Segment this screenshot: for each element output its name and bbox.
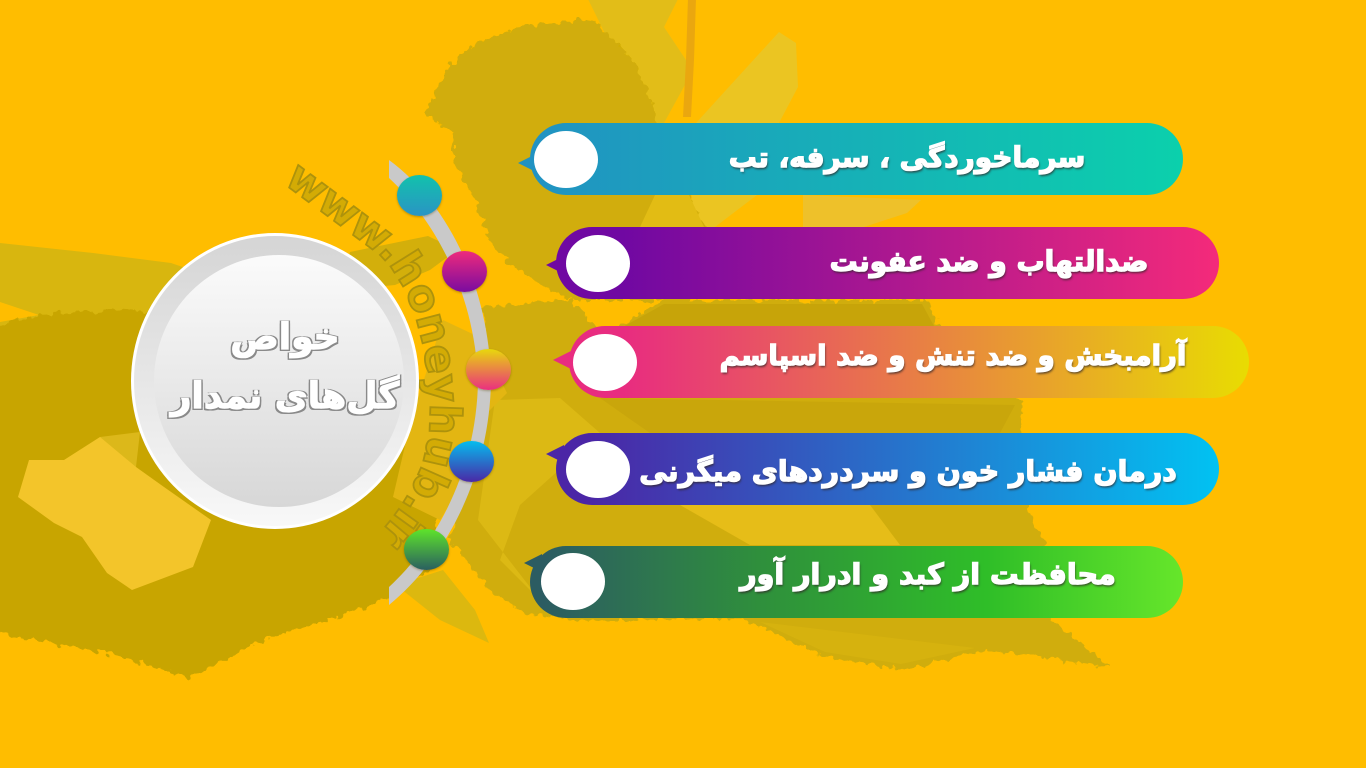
- text: item 4: درمان فشار خون و سردردهای میگرنی: [639, 455, 1177, 488]
- icon: white circle 2: [566, 235, 630, 292]
- heading: central title: خواص: [230, 317, 340, 358]
- icon: white circle 5: [541, 553, 605, 610]
- panel: item 5: [530, 546, 1183, 618]
- panel: item 2: [556, 227, 1219, 299]
- watermark: www.honeyhub.ir: www.honeyhub.ir: [288, 164, 464, 550]
- icon: pointer 3: [553, 351, 571, 369]
- icon: white circle 1: [534, 131, 598, 188]
- text: item 2: ضدالتهاب و ضد عفونت: [830, 245, 1148, 278]
- dot: blue: [449, 441, 494, 482]
- text: item 1: سرماخوردگی ، سرفه، تب: [729, 141, 1085, 174]
- icon: pointer 2: [546, 256, 564, 274]
- dot: green: [404, 529, 449, 570]
- panel: item 4: [556, 433, 1219, 505]
- leaf: left: [0, 236, 507, 677]
- dot: teal: [397, 175, 442, 216]
- icon: white circle 3: [573, 334, 637, 391]
- leaf: top centre: [425, 0, 921, 300]
- heading: central title: گل‌های نمدار: [171, 376, 399, 417]
- panel: item 3: [569, 326, 1249, 398]
- icon: pointer 1: [518, 154, 536, 172]
- icon: white circle 4: [566, 441, 630, 498]
- icon: pointer 5: [524, 554, 542, 572]
- heading: central title: [167, 317, 402, 419]
- dot: orange: [466, 349, 511, 390]
- dot: magenta: [442, 251, 487, 292]
- icon: pointer 4: [546, 445, 564, 463]
- curved grey arc: [389, 160, 491, 605]
- central circle: [131, 233, 419, 529]
- text: item 5: محافظت از کبد و ادرار آور: [740, 557, 1116, 591]
- text: item 3: آرامبخش و ضد تنش و ضد اسپاسم: [720, 339, 1186, 372]
- panel: item 1: [530, 123, 1183, 195]
- leaf: right large: [450, 300, 1111, 670]
